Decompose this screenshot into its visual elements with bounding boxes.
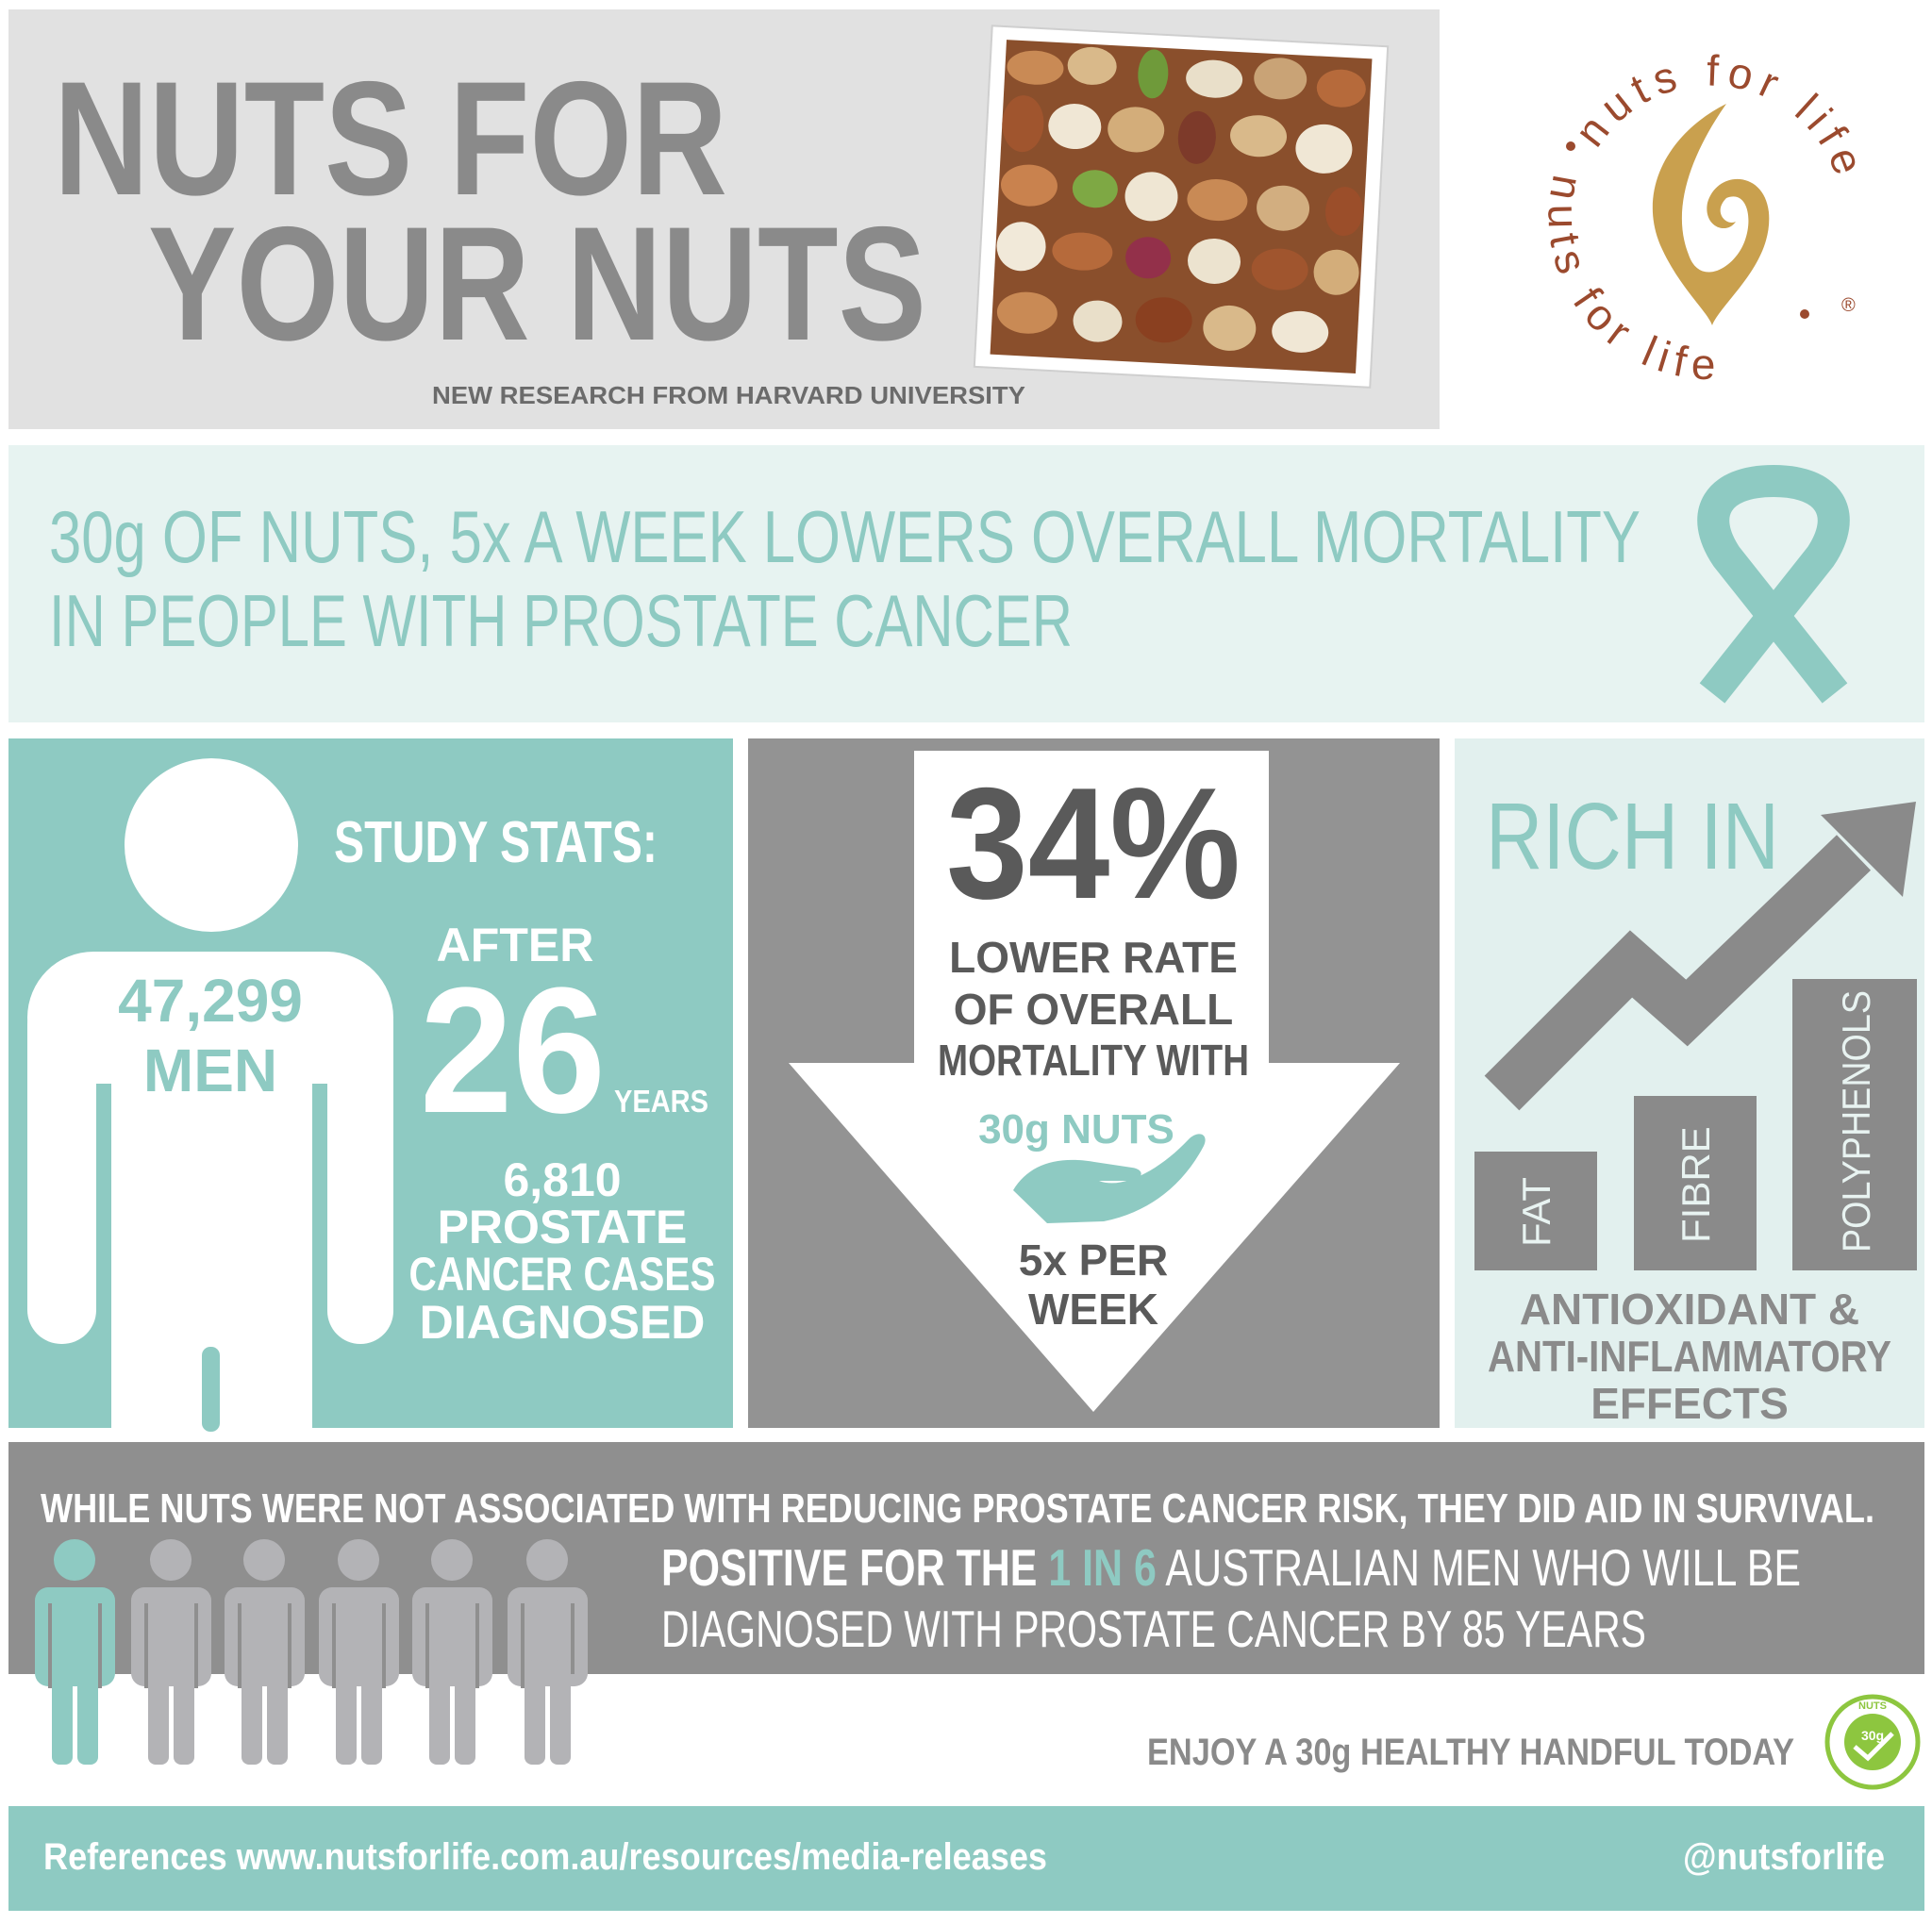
icon: healthy handful badge: NUTS <box>1858 1700 1887 1712</box>
icon: 1 in 6 people <box>35 1539 588 1765</box>
logo: nuts for life <box>1548 55 1856 379</box>
logo: nuts for life: ® <box>1841 295 1856 316</box>
panel: rich in: EFFECTS <box>1591 1379 1789 1428</box>
arrow: down <box>789 751 1400 1412</box>
bar chart: nutrients: POLYPHENOLS <box>1834 990 1878 1252</box>
footer: References www.nutsforlife.com.au/resources/media-releases <box>43 1836 1047 1878</box>
panel: 34% mortality: 34% <box>946 755 1241 932</box>
banner: key finding: IN PEOPLE WITH PROSTATE CANCER <box>49 579 1073 662</box>
icon: hand <box>1013 1134 1206 1223</box>
icon: healthy handful badge: 30g <box>1861 1728 1884 1743</box>
panel: rich in: RICH IN <box>1486 784 1779 889</box>
bar chart: nutrients: FAT <box>1514 1177 1558 1247</box>
panel: 34% mortality: WEEK <box>1028 1285 1158 1334</box>
panel: study stats <box>8 738 733 1432</box>
panel: 34% mortality: 5x PER <box>1019 1236 1168 1285</box>
panel: 34% mortality: 30g NUTS <box>978 1106 1174 1153</box>
panel: study stats: 6,810 <box>503 1153 622 1206</box>
icon: healthy handful badge <box>1827 1697 1918 1787</box>
panel: survival band <box>8 1442 1924 1674</box>
panel: rich in: ANTIOXIDANT & <box>1520 1285 1859 1334</box>
subtitle: NEW RESEARCH FROM HARVARD UNIVERSITY <box>432 381 1025 409</box>
panel: study stats: PROSTATE <box>438 1201 687 1253</box>
panel: 34% mortality: LOWER RATE <box>949 933 1238 982</box>
panel: 34% mortality: OF OVERALL <box>954 985 1233 1034</box>
icon: gold swirl <box>1653 104 1769 325</box>
title <box>54 48 926 374</box>
footer <box>8 1806 1924 1911</box>
panel: 34% mortality: MORTALITY WITH <box>938 1036 1249 1085</box>
panel: study stats: MEN <box>143 1037 277 1104</box>
panel: study stats: STUDY STATS: <box>334 810 658 875</box>
panel: study stats: YEARS <box>614 1084 708 1119</box>
panel: 34% mortality <box>748 738 1440 1428</box>
panel: rich in <box>1455 738 1924 1428</box>
arrow: zigzag up <box>1502 802 1916 1093</box>
photo: mixed nuts <box>974 25 1388 388</box>
panel: study stats: 47,299 <box>118 967 303 1035</box>
title: YOUR NUTS <box>148 193 926 374</box>
panel: study stats: 26 <box>420 951 606 1151</box>
logo: nuts for life: nuts for life <box>1548 175 1713 379</box>
title: NUTS FOR <box>54 48 727 229</box>
panel: header <box>8 9 1440 429</box>
panel: study stats: AFTER <box>437 919 593 971</box>
bar chart: nutrients <box>1474 979 1917 1270</box>
bar chart: nutrients: FIBRE <box>1674 1126 1718 1243</box>
icon: awareness ribbon <box>1712 481 1835 693</box>
icon: person silhouette <box>27 758 393 1432</box>
panel: study stats: CANCER CASES <box>409 1248 715 1301</box>
logo: nuts for life: nuts for life <box>1579 55 1855 174</box>
tagline: ENJOY A 30g HEALTHY HANDFUL TODAY <box>1147 1732 1794 1773</box>
banner: key finding <box>8 445 1924 722</box>
panel: study stats: DIAGNOSED <box>420 1296 705 1349</box>
footer: @nutsforlife <box>1683 1836 1885 1878</box>
